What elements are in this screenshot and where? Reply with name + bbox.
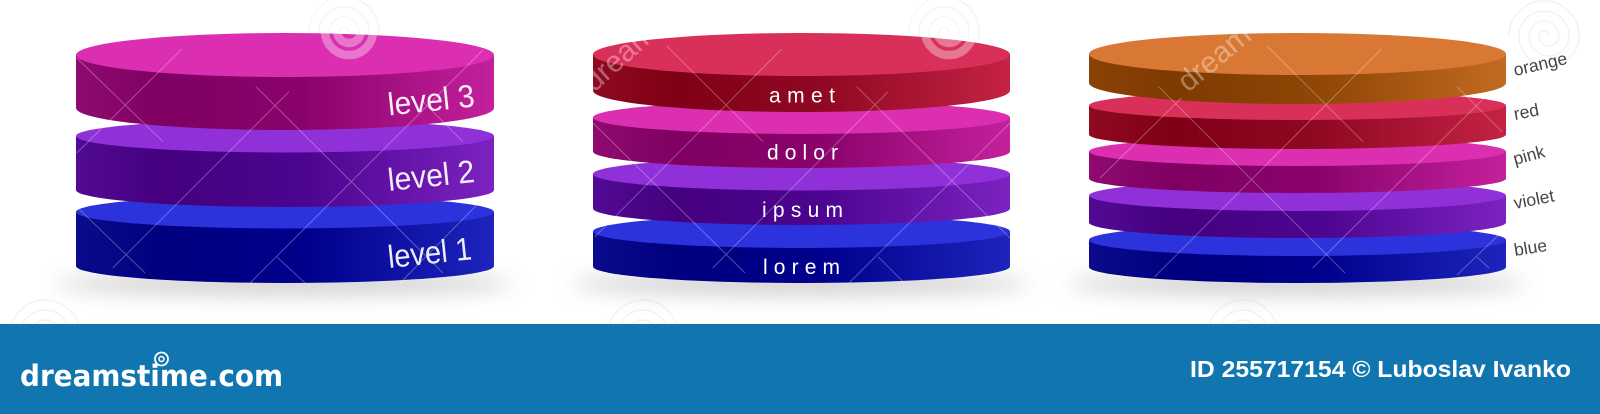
disc: blue	[1089, 224, 1506, 283]
watermark lines	[1100, 46, 1502, 277]
label: amet: amet	[769, 84, 835, 108]
stack: colour names	[1069, 18, 1569, 295]
disc: ipsum	[593, 158, 1010, 225]
disc: level 3	[76, 33, 494, 130]
shadow	[57, 273, 513, 295]
disc: lorem	[593, 215, 1010, 283]
footer banner	[0, 324, 1600, 414]
watermark text: dream	[577, 17, 662, 98]
disc: amet	[593, 33, 1010, 112]
label: level 2: level 2	[386, 153, 476, 198]
label: violet: violet	[1512, 185, 1556, 213]
label: pink: pink	[1511, 141, 1547, 169]
stack: level 1 to 3	[57, 1, 513, 295]
image id and credit: ID 255717154 © Luboslav Ivanko	[1190, 356, 1571, 382]
watermark spiral	[313, 1, 373, 55]
watermark text: dream	[1171, 18, 1258, 98]
label: dolor: dolor	[767, 142, 838, 164]
label: level 1: level 1	[386, 230, 473, 275]
disc: pink	[1089, 137, 1506, 193]
disc: level 2	[76, 120, 494, 207]
label: level 3: level 3	[386, 78, 476, 122]
disc: level 1	[76, 196, 494, 283]
label: red: red	[1512, 99, 1541, 124]
label: ipsum: ipsum	[762, 199, 843, 222]
icon: spiral	[155, 352, 168, 366]
watermark lines	[77, 49, 483, 283]
watermark spiral	[913, 1, 973, 55]
disc: red	[1089, 91, 1506, 149]
disc: orange	[1089, 33, 1506, 104]
shadow	[1069, 273, 1525, 295]
label: blue: blue	[1512, 235, 1548, 260]
label: orange: orange	[1511, 48, 1569, 80]
disc: violet	[1089, 180, 1506, 238]
stack: lorem ipsum dolor amet	[573, 1, 1029, 295]
logo: dreamstime.com: dreamstime.com	[20, 359, 283, 393]
shadow	[573, 273, 1029, 295]
label: lorem: lorem	[763, 256, 840, 279]
disc: dolor	[593, 101, 1010, 168]
watermark lines	[593, 46, 1010, 283]
